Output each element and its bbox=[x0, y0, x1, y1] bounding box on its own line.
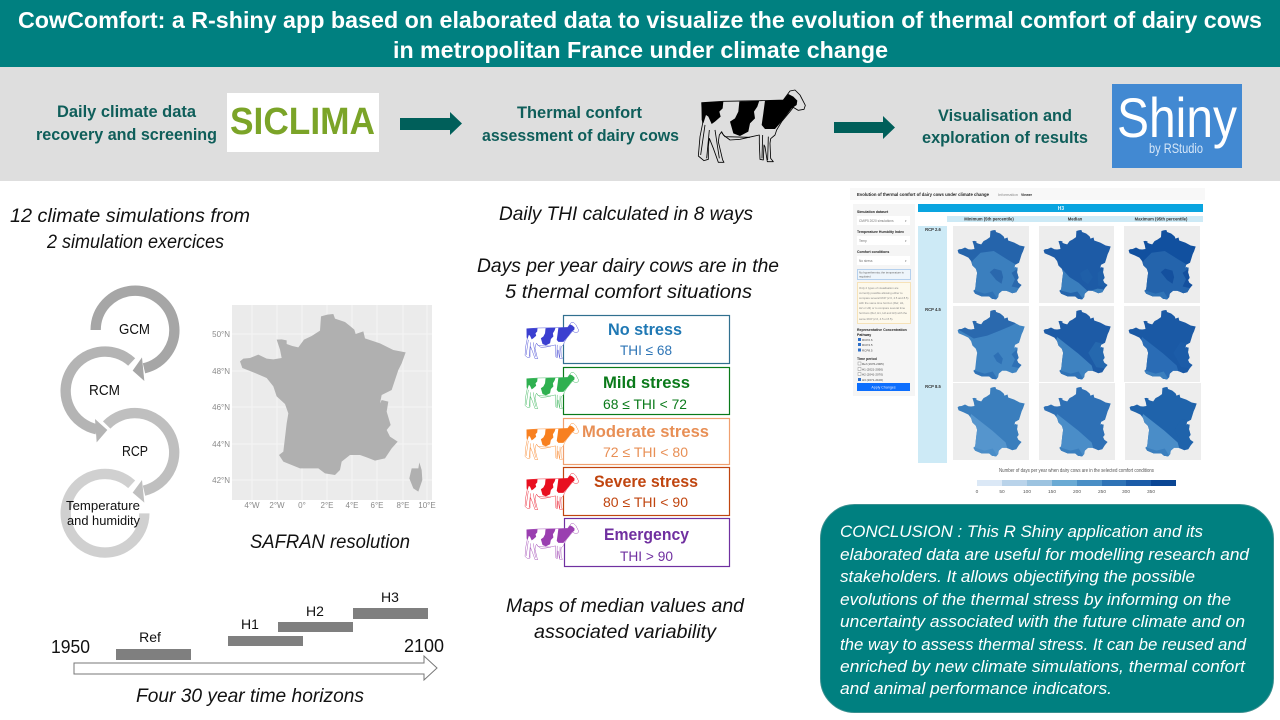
label: temperature and humidity: and humidity bbox=[67, 514, 141, 528]
app sidebar: same RCP (2.6, 4.5 or 8.5). bbox=[859, 317, 893, 321]
RCP row header column bbox=[918, 226, 947, 463]
step 3 text: visualisation bbox=[922, 106, 1088, 147]
step 2 text: thermal comfort assessment bbox=[482, 103, 679, 145]
callout: conclusion: enriched by new climate simulations, thermal confort bbox=[840, 657, 1246, 676]
title banner bbox=[0, 0, 1280, 67]
app sidebar: ▾ bbox=[905, 239, 907, 243]
app sidebar: CMIP5 2020 simulations bbox=[859, 219, 894, 223]
map: RCP 4.5 maximum bbox=[1124, 306, 1200, 382]
app header bar: Evolution of thermal comfort of dairy cows under climate change bbox=[857, 192, 989, 198]
panel: emergency bbox=[525, 518, 730, 566]
app sidebar bbox=[853, 204, 915, 396]
map: SAFRAN resolution grid of France: 46°N bbox=[212, 403, 230, 412]
app sidebar: horizons (Ref, H1, H2 and H3) with the bbox=[859, 311, 907, 315]
heading: climate simulations bbox=[10, 206, 250, 253]
app sidebar: Ref (1976-2005) bbox=[862, 362, 884, 366]
app sidebar: RCP2.6 bbox=[862, 338, 873, 342]
step 1 text: climate data recovery: Daily climate data bbox=[57, 102, 197, 121]
arrow ring: RCM bbox=[66, 352, 132, 442]
RCP row header column: RCP 2.6 bbox=[925, 227, 942, 232]
app sidebar: with the same time horizon (Ref, H1, bbox=[859, 301, 904, 305]
map: SAFRAN resolution grid of France: 10°E bbox=[418, 501, 436, 510]
logo: Shiny by RStudio: by RStudio bbox=[1149, 140, 1203, 156]
bar: H2 bbox=[278, 622, 353, 632]
map: RCP 2.6 median bbox=[1039, 226, 1114, 303]
heading: days per year in comfort situations: Days per year dairy cows are in the bbox=[477, 256, 779, 277]
label: RCP: RCP bbox=[122, 444, 148, 460]
percentile column headers: Minimum (5th percentile) bbox=[964, 216, 1014, 222]
map: RCP 8.5 minimum bbox=[953, 383, 1029, 460]
percentile column headers: Median bbox=[1068, 216, 1083, 222]
colour scale legend: 250 bbox=[1098, 489, 1106, 495]
callout: conclusion: elaborated data are useful for modelling research and bbox=[840, 545, 1250, 564]
app sidebar: ▾ bbox=[905, 219, 907, 223]
timeline labels: H2 bbox=[306, 603, 324, 619]
bar: Ref bbox=[116, 649, 191, 660]
H3 header bar bbox=[918, 204, 1203, 212]
panel: mild stress: Mild stress bbox=[603, 374, 690, 392]
step 2 text: thermal comfort assessment: Thermal confort bbox=[517, 103, 642, 122]
app sidebar: Representative Concentration bbox=[857, 328, 907, 332]
colour scale legend: 50 bbox=[999, 489, 1005, 495]
label: GCM: GCM bbox=[119, 322, 150, 338]
panel: workflow band bbox=[0, 67, 1280, 181]
panel: severe stress: Severe stress bbox=[594, 473, 698, 491]
app sidebar: compare several RCP (2.6, 4.5 and 8.5) bbox=[859, 296, 908, 300]
map: SAFRAN resolution grid of France: 2°E bbox=[321, 501, 333, 510]
percentile column headers: Maximum (95th percentile) bbox=[1135, 216, 1188, 222]
timeline labels: H3 bbox=[381, 589, 399, 605]
callout: conclusion: the way to assess thermal stress. It can be reused and bbox=[840, 635, 1247, 654]
panel: no stress: No stress bbox=[608, 321, 682, 339]
heading: daily THI: Daily THI calculated in 8 ways bbox=[499, 204, 753, 225]
title banner: CowComfort: a R-shiny app based on elaborated data to visualize the evolution of thermal comfort of dairy cows bbox=[18, 7, 1262, 33]
panel: moderate stress: Moderate stress bbox=[582, 423, 709, 441]
map: RCP 8.5 maximum bbox=[1125, 383, 1201, 460]
colour scale legend: 200 bbox=[1073, 489, 1081, 495]
app header bar bbox=[850, 188, 1205, 200]
label: RCM: RCM bbox=[89, 383, 120, 399]
app sidebar: Only 2 types of visualisation are bbox=[859, 286, 899, 290]
app sidebar: H3 (2071-2100) bbox=[862, 378, 883, 382]
bar: H1 bbox=[228, 636, 303, 646]
H3 header bar: H3 bbox=[1058, 206, 1064, 212]
step 1 text: climate data recovery: recovery and screening bbox=[36, 125, 217, 144]
app sidebar: Pathway bbox=[857, 333, 871, 337]
text: maps of median values bbox=[506, 596, 745, 643]
map: SAFRAN resolution grid of France: 2°W bbox=[269, 501, 285, 510]
label: temperature and humidity: Temperature bbox=[66, 499, 140, 513]
panel: no stress: THI ≤ 68 bbox=[620, 342, 672, 358]
bar: H3 bbox=[353, 608, 428, 619]
callout: conclusion: stakeholders. It allows objectifying the possible bbox=[840, 567, 1195, 586]
step 2 text: thermal comfort assessment: assessment of dairy cows bbox=[482, 126, 679, 145]
panel: severe stress: 80 ≤ THI < 90 bbox=[603, 494, 688, 510]
panel: moderate stress: 72 ≤ THI < 80 bbox=[603, 444, 688, 460]
app sidebar: Comfort conditions bbox=[857, 250, 889, 254]
panel: emergency: THI > 90 bbox=[620, 548, 673, 564]
map: SAFRAN resolution grid of France: 50°N bbox=[212, 330, 230, 339]
colour scale legend: 300 bbox=[1122, 489, 1130, 495]
callout: conclusion bbox=[820, 504, 1274, 712]
colour scale legend: 0 bbox=[976, 489, 979, 495]
arrow ring: temperature and humidity bbox=[66, 474, 144, 553]
arrow ring: GCM bbox=[96, 291, 174, 381]
callout: conclusion: and animal performance indicators. bbox=[840, 679, 1112, 698]
callout: conclusion: CONCLUSION : This R Shiny application and its bbox=[840, 522, 1203, 541]
map: SAFRAN resolution grid of France: 48°N bbox=[212, 367, 230, 376]
app sidebar: H2 (2041-2070) bbox=[862, 372, 883, 376]
step 1 text: climate data recovery bbox=[36, 102, 217, 144]
caption: SAFRAN resolution: SAFRAN resolution bbox=[250, 532, 410, 553]
panel: severe stress bbox=[525, 468, 730, 516]
icon: dairy cow bbox=[698, 90, 805, 162]
app sidebar: No stress bbox=[859, 259, 873, 263]
arrow: step 1 to step 2 bbox=[400, 112, 462, 135]
colour scale legend bbox=[976, 480, 1176, 495]
panel: mild stress: 68 ≤ THI < 72 bbox=[603, 396, 687, 412]
map: RCP 8.5 median bbox=[1039, 383, 1115, 460]
callout: conclusion: evolutions of the thermal stress by informing on the bbox=[840, 590, 1231, 609]
timeline labels: H1 bbox=[241, 616, 259, 632]
heading: days per year in comfort situations: 5 thermal comfort situations bbox=[505, 282, 753, 303]
colour scale legend: 150 bbox=[1048, 489, 1056, 495]
RCP row header column: RCP 4.5 bbox=[925, 307, 942, 312]
arrow: step 2 to step 3 bbox=[834, 116, 895, 139]
diagram: model chain of circular arrows bbox=[66, 291, 174, 553]
logo: SICLIMA: SICLIMA bbox=[230, 101, 375, 143]
map: RCP 2.6 minimum bbox=[953, 226, 1029, 303]
callout: conclusion: uncertainty associated with the future climate and on bbox=[840, 612, 1245, 631]
app sidebar: H2 or H3) or to compare several time bbox=[859, 306, 905, 310]
logo: Shiny by RStudio: Shiny bbox=[1117, 86, 1237, 149]
heading: climate simulations: 12 climate simulations from bbox=[10, 206, 250, 227]
app sidebar: RCP8.5 bbox=[862, 348, 873, 352]
step 3 text: visualisation: Visualisation and bbox=[938, 106, 1072, 125]
panel: emergency: Emergency bbox=[604, 526, 690, 544]
colour scale legend: 100 bbox=[1023, 489, 1031, 495]
app header bar: Viewer bbox=[1021, 193, 1032, 197]
map: SAFRAN resolution grid of France: 42°N bbox=[212, 476, 230, 485]
label: temperature and humidity bbox=[66, 499, 141, 528]
year: 2100: 2100 bbox=[404, 636, 444, 656]
map: SAFRAN resolution grid of France bbox=[212, 305, 436, 510]
map: SAFRAN resolution grid of France: 4°W bbox=[244, 501, 260, 510]
app sidebar: ▾ bbox=[905, 259, 907, 263]
map: SAFRAN resolution grid of France: 0° bbox=[298, 501, 306, 510]
percentile column headers bbox=[947, 216, 1203, 222]
colour scale legend: 350 bbox=[1147, 489, 1155, 495]
heading: days per year in comfort situations bbox=[477, 256, 779, 303]
map: SAFRAN resolution grid of France: 8°E bbox=[397, 501, 409, 510]
map: SAFRAN resolution grid of France: 44°N bbox=[212, 440, 230, 449]
map: SAFRAN resolution grid of France: 4°E bbox=[346, 501, 358, 510]
timeline labels: Ref bbox=[139, 629, 161, 645]
step 3 text: visualisation: exploration of results bbox=[922, 128, 1088, 147]
year: 1950: 1950 bbox=[51, 637, 90, 657]
map: RCP 4.5 median bbox=[1039, 306, 1114, 382]
app sidebar: No hyperthermia; the temperature is bbox=[859, 270, 904, 274]
logo: SICLIMA bbox=[227, 93, 379, 152]
map: RCP 2.6 maximum bbox=[1124, 226, 1200, 303]
app header bar: Information bbox=[998, 193, 1018, 197]
app sidebar: Temperature Humidity Index bbox=[857, 230, 904, 234]
logo: Shiny by RStudio bbox=[1112, 84, 1242, 168]
app sidebar: RCP4.5 bbox=[862, 343, 873, 347]
heading: climate simulations: 2 simulation exercices bbox=[46, 232, 224, 253]
map: RCP 4.5 minimum bbox=[953, 306, 1029, 382]
colour scale caption: Number of days per year when dairy cows are in the selected comfort conditions bbox=[999, 468, 1154, 474]
app sidebar: regulated bbox=[859, 274, 871, 278]
app sidebar: Apply Changes bbox=[871, 386, 896, 390]
panel: moderate stress bbox=[525, 418, 730, 464]
title banner: in metropolitan France under climate change bbox=[393, 37, 888, 63]
timeline: four 30 year horizons bbox=[51, 589, 444, 707]
panel: no stress bbox=[525, 316, 730, 364]
timeline arrow bbox=[74, 656, 437, 680]
app sidebar: H1 (2021-2050) bbox=[862, 368, 883, 372]
caption: time horizons: Four 30 year time horizons bbox=[136, 686, 364, 707]
arrow ring: RCP bbox=[107, 413, 174, 503]
panel: R Shiny app screenshot bbox=[850, 188, 1205, 495]
app sidebar: currently possible allowing either to bbox=[859, 291, 903, 295]
timeline labels bbox=[139, 589, 399, 645]
app sidebar: Temp bbox=[859, 239, 867, 243]
text: maps of median values: associated variability bbox=[534, 622, 718, 643]
map: SAFRAN resolution grid of France: 6°E bbox=[371, 501, 383, 510]
app sidebar: Simulation dataset bbox=[857, 210, 889, 214]
text: maps of median values: Maps of median values and bbox=[506, 596, 745, 617]
panel: mild stress bbox=[525, 368, 730, 414]
RCP row header column: RCP 8.5 bbox=[925, 384, 942, 389]
app sidebar: Time period bbox=[857, 357, 877, 361]
